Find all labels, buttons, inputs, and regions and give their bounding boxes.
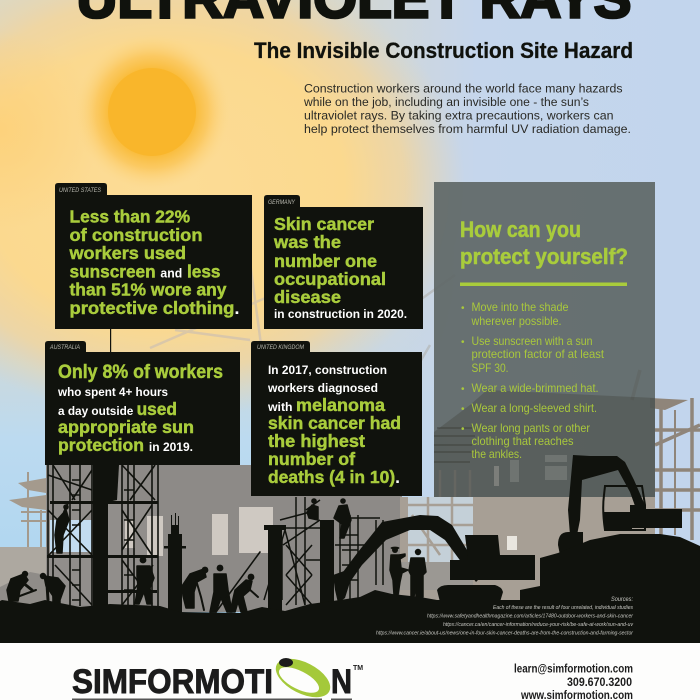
left distant frame <box>9 472 46 570</box>
worker bent with shovel <box>182 567 208 610</box>
callout: United States: of construction <box>70 225 202 245</box>
callout: Australia: who spent 4+ hours <box>57 385 168 399</box>
worker bent left 2 <box>40 573 65 606</box>
panel: how can you protect yourself <box>434 182 655 497</box>
two supervisors <box>390 547 426 597</box>
contact details <box>514 662 633 700</box>
scaffold left <box>48 465 158 606</box>
logo: TM <box>353 665 363 672</box>
safety tips list: Wear long pants or other <box>472 421 590 435</box>
callout: United Kingdom <box>251 341 422 496</box>
excavator right <box>558 455 682 555</box>
intro text: ultraviolet rays. By taking extra precautions, workers can <box>304 108 614 122</box>
logo: SIMFORMOTI <box>72 663 273 700</box>
callout: United Kingdom: UNITED KINGDOM <box>257 344 305 351</box>
safety tips list: • <box>461 404 465 415</box>
intro text <box>303 82 631 136</box>
intro text: while on the job, including an invisible one - the sun’s <box>303 95 589 109</box>
figure on top deck <box>108 465 119 502</box>
callout: Australia: a day outside used <box>58 399 177 419</box>
callout: United States: Less than 22% <box>70 206 190 226</box>
sources: https://cancer.ca/en/cancer-information/reduce-your-risk/be-safe-at-work/sun-and-uv <box>443 622 634 628</box>
callout: Germany: was the <box>273 232 341 252</box>
heading: How can you <box>460 217 581 242</box>
worker on centre scaffold <box>307 498 351 538</box>
safety tips list: the ankles. <box>472 447 522 461</box>
workers <box>7 498 426 612</box>
safety tips list <box>461 300 605 461</box>
intro text: Construction workers around the world face many hazards <box>304 82 622 96</box>
scaffold centre <box>264 497 383 605</box>
callout: United Kingdom: skin cancer had <box>268 413 401 433</box>
cranes behind boxes <box>150 262 455 362</box>
heading <box>460 217 628 269</box>
logo: N <box>331 663 352 700</box>
skeleton upper right <box>632 370 700 540</box>
callout: United States: workers used <box>68 243 186 263</box>
safety tips list: Use sunscreen with a sun <box>472 334 592 348</box>
safety tips list: Move into the shade <box>472 300 569 314</box>
building windows <box>125 507 273 556</box>
callout: Germany: number one <box>274 251 377 271</box>
callout: United States <box>55 183 252 329</box>
safety tips list: protection factor of at least <box>472 347 605 361</box>
construction site background <box>0 262 700 612</box>
connector line <box>110 329 111 353</box>
callout: Germany: in construction in 2020. <box>274 307 407 321</box>
sun <box>74 34 230 190</box>
safety tips list: • <box>461 384 465 395</box>
sources: https://www.safetyandhealthmagazine.com/articles/17480-outdoor-workers-and-skin-cancer <box>427 614 633 620</box>
sources: Each of these are the result of four unrelated, individual studies <box>493 605 633 611</box>
callout: United States: UNITED STATES <box>59 187 102 194</box>
safety tips list: • <box>461 424 465 435</box>
callout: Germany: disease <box>274 287 341 307</box>
callout: United Kingdom: the highest <box>268 431 365 451</box>
tan building right <box>400 497 540 600</box>
callout: Germany: occupational <box>274 269 386 289</box>
safety tips list: Wear a long-sleeved shirt. <box>472 401 597 415</box>
subtitle: The Invisible Construction Site Hazard <box>254 38 633 63</box>
excavator centre <box>333 515 535 603</box>
construction silhouettes <box>0 455 700 643</box>
callout: United Kingdom: workers diagnosed <box>267 381 378 395</box>
ground <box>0 534 700 643</box>
building showing through the panel <box>434 390 655 497</box>
main grey building <box>46 465 402 612</box>
heading: protect yourself? <box>460 244 628 269</box>
sources <box>376 597 634 636</box>
callout: Australia: protection in 2019. <box>58 435 193 455</box>
sources: Sources: <box>611 597 633 603</box>
worker walking scaffold base <box>135 557 154 604</box>
callout: Germany <box>264 195 423 329</box>
contact details: 309.670.3200 <box>567 675 632 689</box>
callout: United Kingdom: with melanoma <box>267 395 385 415</box>
callout: United Kingdom: In 2017, construction <box>268 363 387 377</box>
worker on scaffold <box>55 503 69 553</box>
safety tips list: clothing that reaches <box>472 434 574 448</box>
safety tips list: • <box>461 337 465 348</box>
logo <box>72 651 363 700</box>
intro text: help protect themselves from harmful UV radiation damage. <box>304 122 631 136</box>
callout: Australia: Only 8% of workers <box>58 362 223 383</box>
footer <box>0 643 700 700</box>
callout: United States: sunscreen and less <box>70 262 221 282</box>
contact details: learn@simformotion.com <box>514 662 633 676</box>
callout: United Kingdom: number of <box>268 449 355 469</box>
callout: Australia <box>45 341 240 465</box>
column with rebar <box>168 534 182 614</box>
safety tips list: • <box>461 303 465 314</box>
safety tips list: SPF 30. <box>472 361 508 375</box>
worker leaning with pole <box>216 552 260 612</box>
callout: United States: protective clothing . <box>70 298 240 318</box>
callout: United Kingdom: deaths (4 in 10). <box>268 467 400 487</box>
callout: United States: than 51% wore any <box>70 280 227 300</box>
callout: Australia: AUSTRALIA <box>49 344 80 351</box>
callout: Germany: Skin cancer <box>274 214 374 234</box>
callout: Australia: appropriate sun <box>58 417 194 437</box>
sources: https://www.cancer.ie/about-us/news/one-in-four-skin-cancer-deaths-are-from-the-construction-and-farming-sector <box>376 630 633 636</box>
worker standing <box>210 565 232 612</box>
safety tips list: Wear a wide-brimmed hat. <box>472 381 598 395</box>
callout: Germany: GERMANY <box>268 199 296 206</box>
worker bent left 1 <box>7 571 36 601</box>
column right <box>268 530 282 615</box>
safety tips list: wherever possible. <box>471 314 562 328</box>
